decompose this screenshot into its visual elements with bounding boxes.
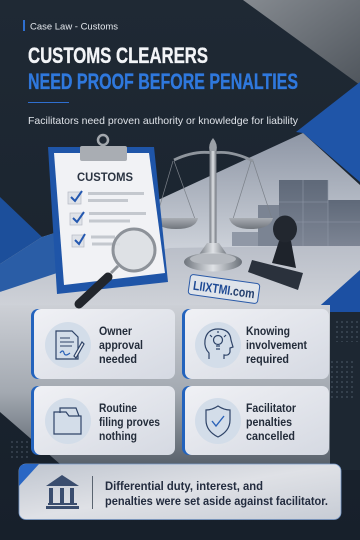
conclusion text: penalties were set aside against facilitator. [105, 496, 328, 508]
icon: head with light bulb [195, 322, 241, 368]
icon: signed document [45, 322, 91, 368]
tag: case law: Case Law - Customs [30, 22, 118, 32]
card text: approval [99, 340, 143, 352]
checklist [68, 191, 146, 247]
conclusion text [105, 481, 328, 508]
card text [99, 326, 143, 366]
card: routine filing [31, 386, 175, 455]
card: penalties cancelled [182, 386, 329, 455]
card text: Facilitator [246, 403, 296, 415]
clipboard heading: CUSTOMS [77, 170, 133, 184]
logo badge: LIIXTMI.com [192, 278, 256, 301]
card: knowing involvement [182, 309, 329, 379]
divider [92, 476, 93, 509]
card text [99, 403, 160, 443]
card text: involvement [246, 340, 307, 352]
card text: Routine [99, 403, 137, 415]
conclusion strip [19, 464, 341, 520]
conclusion text: Differential duty, interest, and [105, 481, 263, 493]
card text [246, 326, 307, 366]
card text: Owner [99, 326, 132, 338]
containers [232, 180, 360, 246]
icon: folder [45, 398, 91, 444]
rubber stamp [248, 216, 303, 290]
card text: needed [99, 354, 137, 366]
magnifying glass [79, 229, 155, 304]
card: owner approval [31, 309, 175, 379]
title: CUSTOMS CLEARERS [28, 43, 208, 68]
card text: required [246, 354, 289, 366]
card text [246, 403, 296, 443]
card text: penalties [246, 417, 292, 429]
card text: nothing [99, 431, 137, 443]
title rule [28, 102, 69, 103]
clipboard [48, 135, 168, 294]
card text: Knowing [246, 326, 290, 338]
icon: courthouse [46, 475, 79, 509]
subtitle: Facilitators need proven authority or knowledge for liability [28, 115, 299, 127]
card text: filing proves [99, 417, 160, 429]
scales of justice [154, 138, 273, 272]
icon: shield check [195, 398, 241, 444]
card text: cancelled [246, 431, 295, 443]
clip [80, 135, 127, 161]
title [28, 43, 298, 94]
